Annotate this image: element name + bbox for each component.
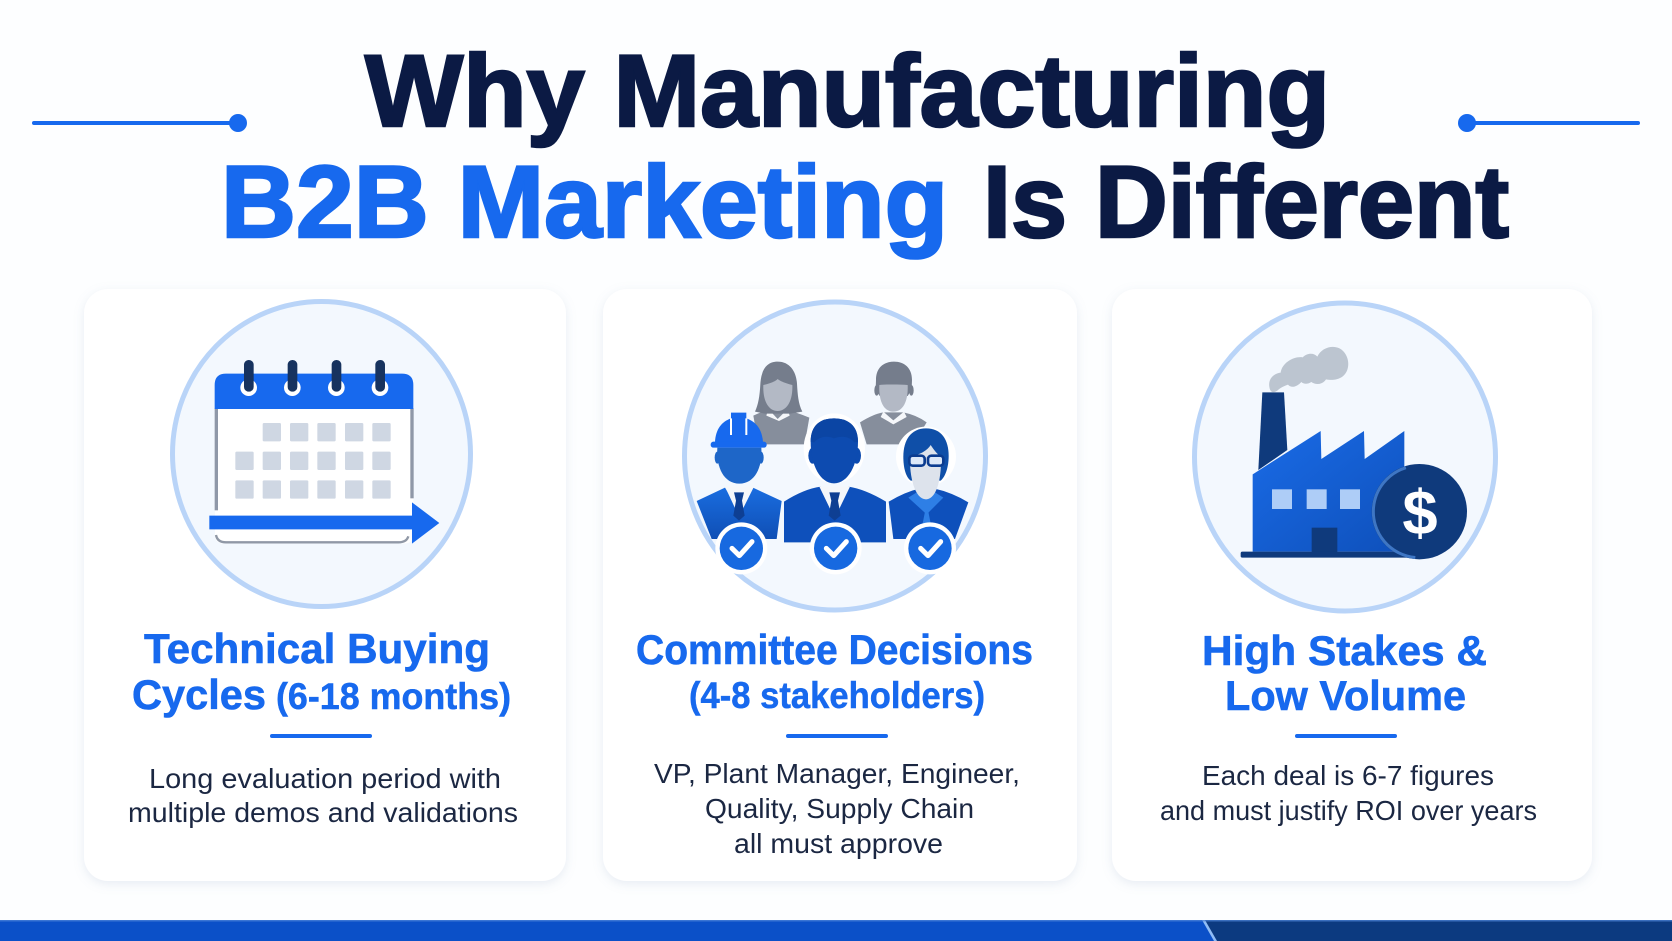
heading: Low Volume	[1225, 672, 1466, 719]
heading	[1202, 627, 1487, 719]
panel: technical buying cycles	[84, 289, 566, 881]
heading	[636, 626, 1033, 716]
panel: committee decisions	[603, 289, 1077, 881]
description	[654, 758, 1020, 859]
icon: factory with dollar coin	[1194, 303, 1496, 611]
description: all must approve	[734, 828, 943, 859]
smoke	[1269, 347, 1348, 392]
description: Long evaluation period with	[149, 763, 501, 794]
description	[128, 763, 518, 828]
title: Is Different	[983, 145, 1509, 259]
heading: Cycles	[132, 671, 266, 718]
footer band	[0, 920, 1672, 941]
helmet man	[697, 413, 782, 539]
heading: (6-18 months)	[276, 676, 511, 717]
icon: stakeholders group	[684, 302, 986, 610]
description	[1160, 760, 1537, 826]
title: B2B Marketing	[221, 145, 948, 259]
heading: Technical Buying	[144, 625, 490, 672]
glasses woman	[889, 427, 968, 539]
title: Why Manufacturing	[365, 34, 1330, 148]
approval checks	[715, 522, 956, 574]
heading: Committee Decisions	[636, 626, 1033, 673]
title accent left	[32, 114, 247, 132]
panel: high stakes and low volume	[1112, 289, 1592, 881]
heading	[132, 625, 511, 718]
grey man	[860, 362, 927, 444]
description: and must justify ROI over years	[1160, 795, 1537, 826]
title	[221, 34, 1509, 259]
grey woman	[753, 362, 809, 444]
icon: calendar with arrow	[172, 302, 470, 606]
heading: High Stakes &	[1202, 627, 1487, 674]
description: multiple demos and validations	[128, 797, 518, 828]
description: Quality, Supply Chain	[705, 793, 974, 824]
description: VP, Plant Manager, Engineer,	[654, 758, 1020, 789]
title accent right	[1458, 114, 1640, 132]
description: Each deal is 6-7 figures	[1202, 760, 1494, 791]
icon: factory with dollar coin: $	[1402, 478, 1438, 548]
heading: (4-8 stakeholders)	[689, 675, 985, 716]
center man	[784, 413, 886, 542]
